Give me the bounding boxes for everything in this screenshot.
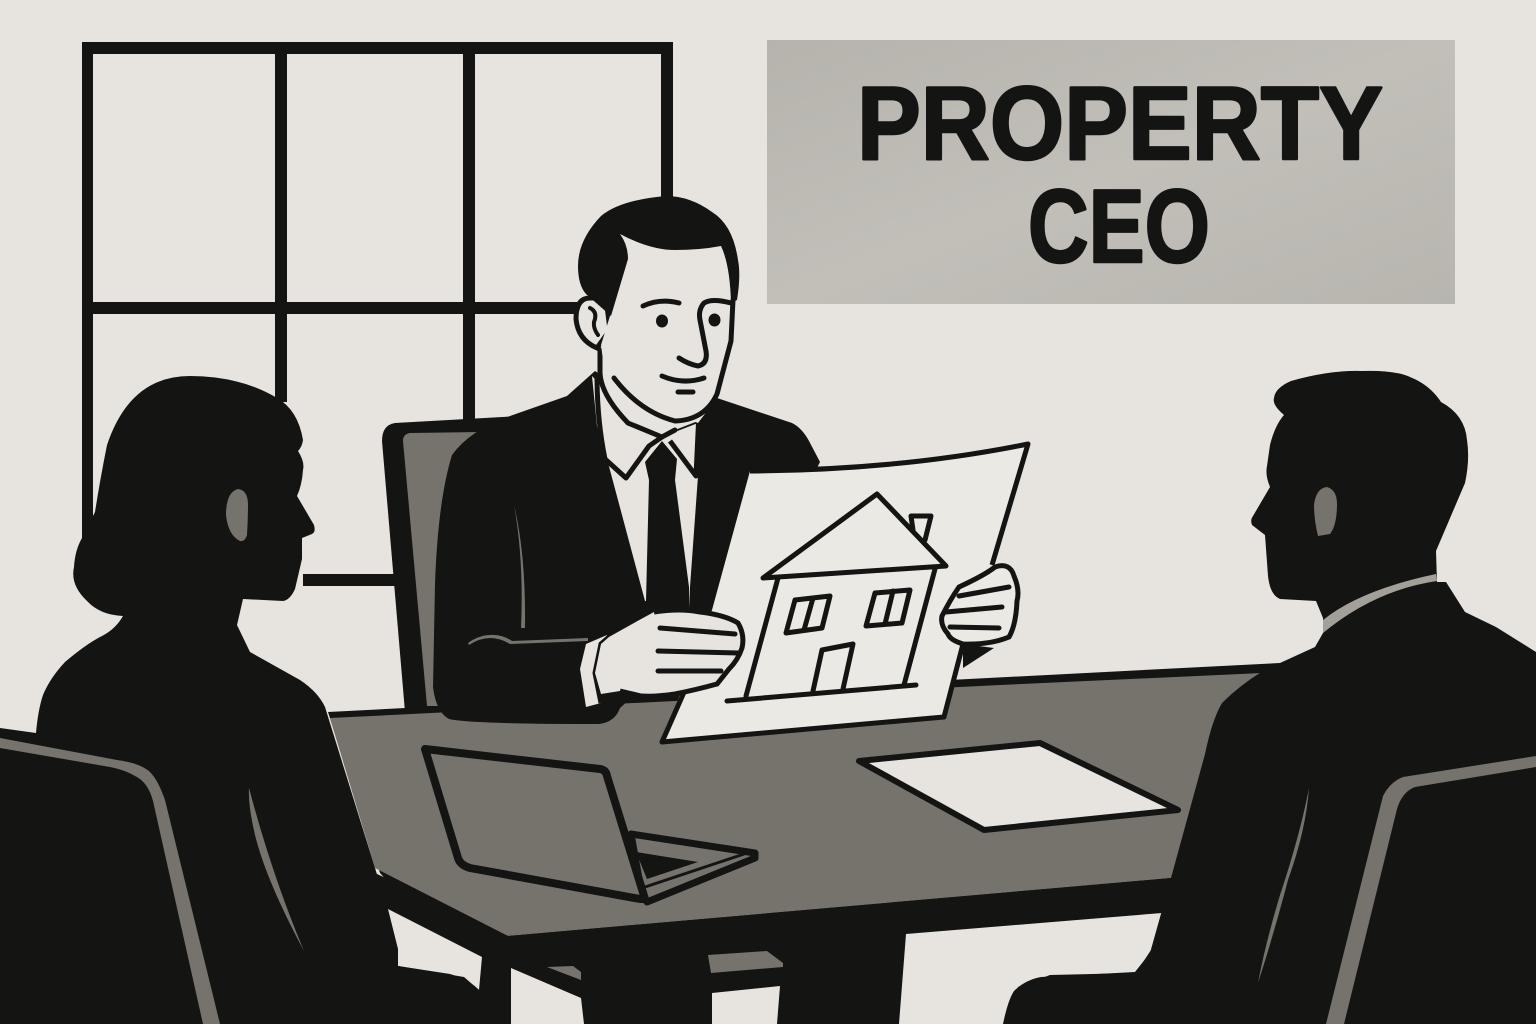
CEO chair <box>382 416 520 712</box>
man collar <box>1323 574 1437 633</box>
man clothing crease <box>1258 788 1309 983</box>
woman clothing crease <box>249 788 304 951</box>
document on table <box>859 743 1178 830</box>
woman ear <box>226 489 248 541</box>
CEO figure <box>433 196 820 724</box>
woman silhouette, left <box>0 376 490 1024</box>
window <box>82 42 673 586</box>
sign text: CEO: CEO <box>1028 169 1210 285</box>
shirt <box>592 376 698 608</box>
house <box>727 494 946 701</box>
title sign <box>767 40 1455 304</box>
hair <box>578 196 739 316</box>
eyes <box>656 314 720 328</box>
woman chair <box>0 728 220 1024</box>
CEO jacket <box>433 371 820 724</box>
collar <box>597 375 698 478</box>
laptop <box>425 749 755 902</box>
man ear <box>1314 487 1337 536</box>
table legs <box>375 873 1171 1024</box>
brow, nose and mouth <box>643 300 731 392</box>
man silhouette, right <box>1003 371 1536 1024</box>
face <box>601 234 733 421</box>
necktie <box>645 441 689 620</box>
ear <box>576 298 610 348</box>
neck <box>600 300 717 437</box>
sign text: PROPERTY: PROPERTY <box>857 66 1383 182</box>
CEO left hand and cuff <box>580 610 743 707</box>
document with house drawing <box>662 444 1028 742</box>
CEO right hand <box>942 566 1018 668</box>
table <box>328 663 1300 1024</box>
jacket highlights <box>514 505 525 628</box>
man chair <box>1326 756 1536 1024</box>
